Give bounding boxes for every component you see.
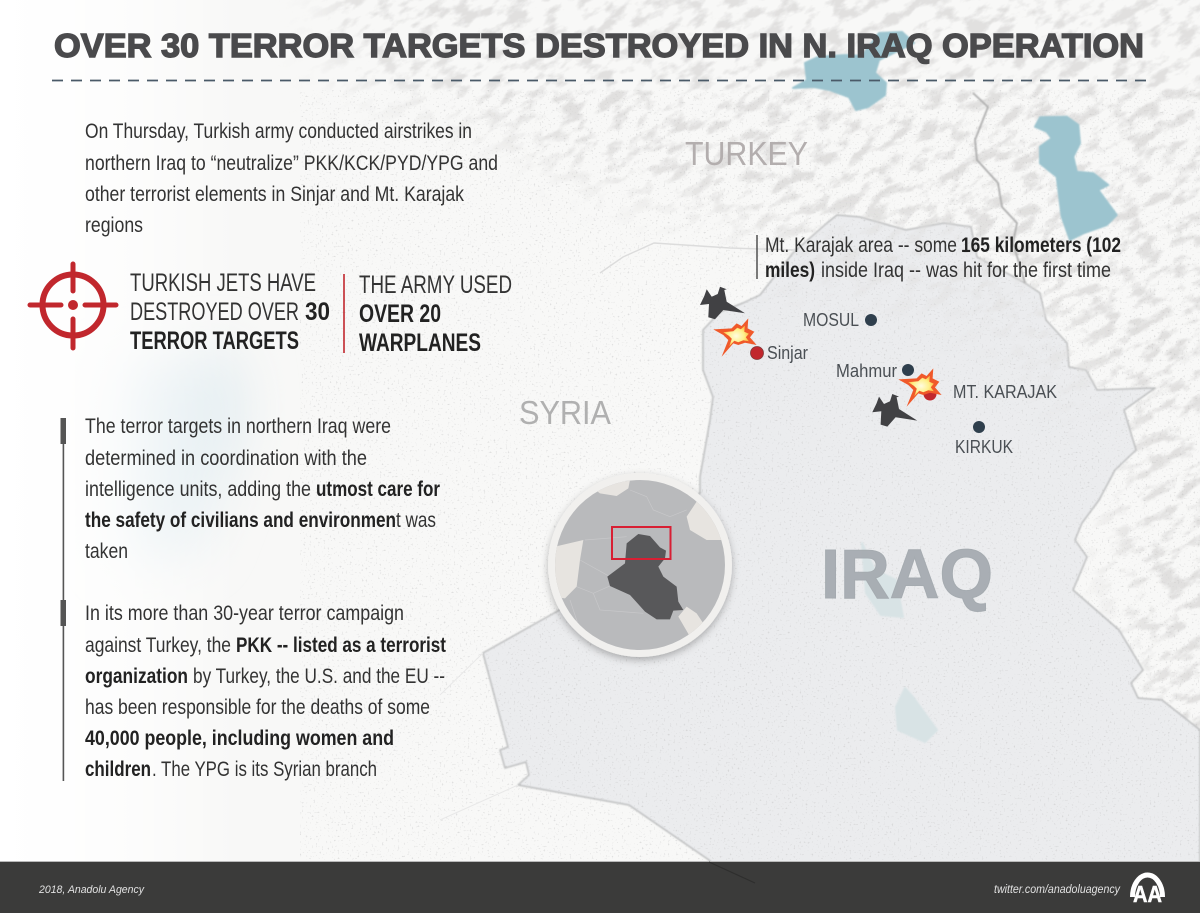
footer bar [0, 862, 1200, 913]
stat: destroyed targets [130, 269, 330, 355]
icon: Anadolu Agency logo: AA [1133, 881, 1162, 907]
stat: destroyed targets: 30 [305, 298, 330, 326]
city: Sinjar [750, 343, 808, 363]
city: Mt. Karajak: MT. KARAJAK [953, 382, 1057, 402]
intro text [85, 120, 498, 237]
lake: Urmia [1035, 117, 1117, 240]
icon: target crosshair [30, 264, 116, 348]
country label: Iraq: IRAQ [821, 535, 993, 613]
city: Mahmur: Mahmur [836, 361, 897, 381]
title: OVER 30 TERROR TARGETS DESTROYED IN N. IRAQ OPERATION [54, 28, 1144, 65]
footer credit: 2018, Anadolu Agency [38, 884, 145, 896]
footer social handle: twitter.com/anadoluagency [994, 884, 1121, 896]
stat divider [343, 274, 345, 353]
lake: Razzaza [896, 688, 937, 742]
left fade [0, 0, 240, 862]
text block: coordination: utmost care for [316, 478, 440, 501]
icon: fighter jet near Mt. Karajak [872, 394, 917, 427]
text block: coordination: intelligence units, adding the [85, 478, 311, 501]
inset locator globe [543, 473, 737, 657]
country label: Syria: SYRIA [519, 394, 611, 431]
faint western borders [440, 653, 518, 820]
surrounding seas [555, 480, 721, 634]
text block: coordination: the safety of civilians and environmen [85, 509, 396, 532]
intro text: other terrorist elements in Sinjar and Mt. Karajak [85, 183, 464, 206]
callout: Mt. Karajak [757, 234, 1121, 282]
text block: PKK campaign: PKK -- listed as a terrorist [236, 634, 446, 657]
lake: Tharthar [862, 543, 903, 617]
stat: warplanes: WARPLANES [359, 329, 481, 357]
city: Sinjar: Sinjar [767, 343, 808, 363]
Iraq silhouette [607, 534, 683, 619]
locator rectangle [612, 527, 670, 559]
stat: destroyed targets: TERROR TARGETS [130, 327, 299, 355]
northern Iraq mountain overlay [819, 226, 1086, 370]
city: Kirkuk: KIRKUK [955, 437, 1013, 457]
text block: PKK campaign [85, 602, 446, 781]
stat: destroyed targets: DESTROYED OVER [130, 298, 299, 326]
region shading: Iraq [483, 215, 1200, 913]
callout: Mt. Karajak: inside Iraq -- was hit for the first time [821, 259, 1111, 282]
text block: PKK campaign: has been responsible for the deaths of some [85, 696, 430, 719]
text block: PKK campaign: 40,000 people, including women and [85, 727, 394, 750]
neighbouring borders [570, 490, 687, 630]
text block: coordination: The terror targets in northern Iraq were [85, 415, 391, 438]
text block: PKK campaign: children [85, 758, 151, 781]
text block: PKK campaign: by Turkey, the U.S. and the EU -- [193, 665, 445, 688]
side rule with markers [60, 418, 66, 781]
text block: PKK campaign: . The YPG is its Syrian branch [152, 758, 377, 781]
sea shading [110, 350, 245, 560]
stat: warplanes [359, 271, 512, 357]
stat: warplanes: THE ARMY USED [359, 271, 512, 299]
city: Mosul: MOSUL [803, 310, 859, 330]
text block: coordination: determined in coordination with the [85, 447, 367, 470]
mountain texture [318, 0, 1200, 729]
city: Kirkuk [955, 421, 1013, 457]
text block: coordination: taken [85, 540, 128, 563]
icon: explosion at Sinjar [713, 318, 757, 357]
text block: coordination: t was [396, 509, 436, 532]
callout: Mt. Karajak: Mt. Karajak area -- some [765, 234, 957, 257]
icon: fighter jet near Sinjar [700, 287, 745, 319]
text block: coordination [85, 415, 440, 563]
intro text: On Thursday, Turkish army conducted airstrikes in [85, 120, 472, 143]
stat: warplanes: OVER 20 [359, 300, 441, 328]
border: Turkey and Iran [973, 93, 1025, 283]
icon: explosion at Mt. Karajak [898, 368, 942, 407]
border: Syria and Turkey [600, 243, 795, 273]
text block: PKK campaign: In its more than 30-year terror campaign [85, 602, 404, 625]
intro text: regions [85, 214, 143, 237]
text block: PKK campaign: organization [85, 665, 188, 688]
text block: PKK campaign: against Turkey, the [85, 634, 231, 657]
title divider [52, 80, 1150, 82]
intro text: northern Iraq to “neutralize” PKK/KCK/PYD/YPG and [85, 152, 498, 175]
lake: Van [793, 32, 914, 110]
stat: destroyed targets: TURKISH JETS HAVE [130, 269, 316, 297]
callout: Mt. Karajak: miles) [765, 259, 815, 282]
speckle [300, 90, 1200, 860]
callout: Mt. Karajak: 165 kilometers (102 [961, 234, 1121, 257]
country label: Turkey: TURKEY [685, 135, 808, 172]
